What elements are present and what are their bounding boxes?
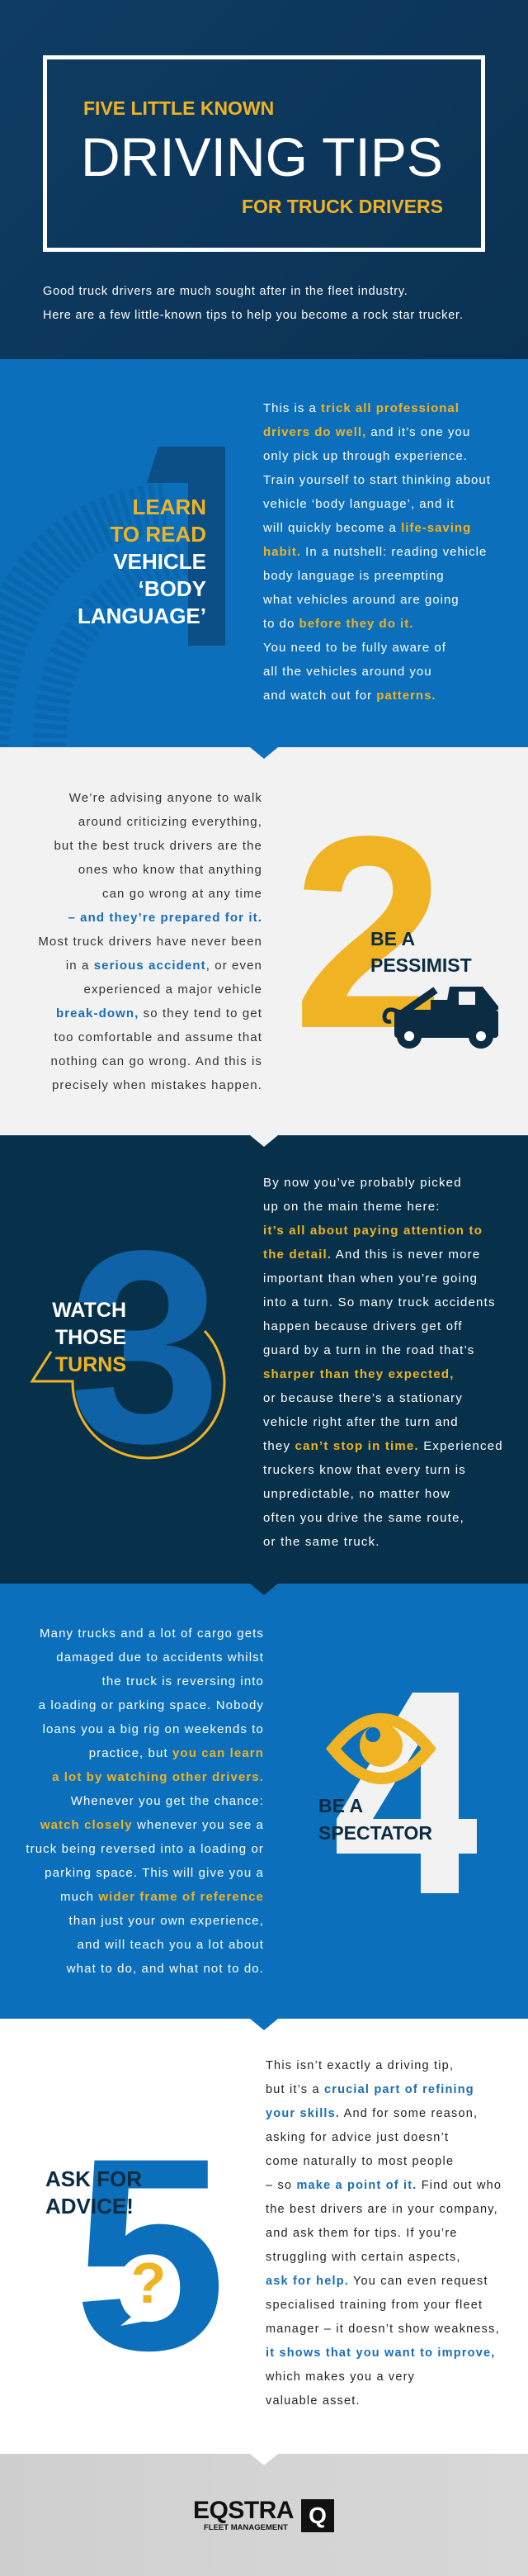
header panel	[0, 0, 528, 359]
icon: eye	[326, 1713, 436, 1784]
logo Q box	[301, 2499, 334, 2532]
body text 4: the truck is reversing into	[102, 1674, 264, 1688]
body text 5: – so make a point of it. Find out who	[266, 2179, 502, 2192]
body text 4: practice, but you can learn	[89, 1746, 264, 1760]
body text 2: experienced a major vehicle	[84, 983, 262, 997]
body text 3: happen because drivers get off	[263, 1319, 463, 1333]
heading 1	[78, 495, 206, 628]
body text 1: to do before they do it.	[263, 617, 413, 631]
body text 5: your skills. And for some reason,	[266, 2107, 478, 2120]
body text 4: Many trucks and a lot of cargo gets	[40, 1627, 264, 1641]
body text 4: damaged due to accidents whilst	[56, 1650, 264, 1664]
body text 1: vehicle ‘body language’, and it	[263, 497, 455, 511]
body text 4: a loading or parking space. Nobody	[39, 1698, 264, 1712]
body text 3: up on the main theme here:	[263, 1200, 441, 1214]
body text 5	[266, 2059, 502, 2408]
body text 3: guard by a turn in the road that’s	[263, 1343, 475, 1357]
numeral 4	[337, 1693, 477, 1893]
title frame	[43, 55, 485, 252]
body text 2: precisely when mistakes happen.	[52, 1078, 262, 1092]
heading 4: BE A	[318, 1795, 363, 1816]
body text 1: body language is preempting	[263, 569, 445, 583]
body text 2: can go wrong at any time	[102, 887, 262, 901]
arrow pointer	[250, 1135, 278, 1147]
body text 4: watch closely whenever you see a	[40, 1818, 264, 1832]
intro text	[43, 285, 464, 322]
body text 1: This is a trick all professional	[263, 401, 460, 415]
body text 4: loans you a big rig on weekends to	[43, 1722, 264, 1736]
body text 3: the detail. And this is never more	[263, 1248, 480, 1262]
heading 5: ADVICE!	[45, 2194, 134, 2218]
body text 1: will quickly become a life-saving	[263, 521, 471, 535]
body text 1: and watch out for patterns.	[263, 689, 436, 703]
arrow pointer	[250, 747, 278, 759]
heading 5	[45, 2166, 142, 2218]
heading 2: PESSIMIST	[370, 954, 472, 976]
heading 1: TO READ	[110, 522, 206, 547]
body text 4	[26, 1627, 264, 1976]
icon: question mark: ?	[131, 2251, 166, 2315]
arrow pointer	[250, 2019, 278, 2030]
body text 2: nothing can go wrong. And this is	[51, 1054, 262, 1068]
body text 3: often you drive the same route,	[263, 1511, 464, 1525]
body text 3: vehicle right after the turn and	[263, 1415, 459, 1429]
intro text: Good truck drivers are much sought after in the fleet industry.	[43, 285, 408, 298]
body text 1: all the vehicles around you	[263, 665, 432, 679]
section 4: be a spectator	[0, 1584, 528, 2019]
section 5: ask for advice	[0, 2019, 528, 2454]
body text 2: – and they’re prepared for it.	[68, 911, 262, 925]
heading 2: BE A	[370, 928, 415, 949]
heading 3	[52, 1299, 126, 1376]
body text 3: into a turn. So many truck accidents	[263, 1295, 496, 1309]
body text 3: or the same truck.	[263, 1535, 380, 1549]
body text 2: Most truck drivers have never been	[38, 935, 262, 949]
body text 5: it shows that you want to improve,	[266, 2346, 495, 2360]
logo tagline: FLEET MANAGEMENT	[204, 2523, 288, 2532]
body text 3: By now you’ve probably picked	[263, 1176, 462, 1190]
numeral 3: 3	[69, 1194, 221, 1500]
title: driving tips: DRIVING TIPS	[81, 126, 443, 187]
heading 1: ‘BODY	[139, 576, 206, 601]
body text 1: what vehicles around are going	[263, 593, 460, 607]
icon: tow truck	[383, 987, 498, 1049]
section 3: watch those turns	[0, 1135, 528, 1584]
numeral 2: 2	[293, 779, 445, 1086]
body text 3: or because there’s a stationary	[263, 1391, 463, 1405]
body text 3: important than when you’re going	[263, 1271, 478, 1286]
body text 2: but the best truck drivers are the	[54, 839, 262, 853]
body text 2: ones who know that anything	[78, 863, 262, 877]
body text 3: sharper than they expected,	[263, 1367, 455, 1381]
body text 4: than just your own experience,	[69, 1914, 264, 1928]
body text 5: ask for help. You can even request	[266, 2275, 488, 2288]
body text 4: a lot by watching other drivers.	[52, 1770, 264, 1784]
body text 4: and will teach you a lot about	[78, 1938, 264, 1952]
tire tracks decoration	[0, 483, 188, 747]
numeral 1	[147, 447, 225, 646]
body text 4: parking space. This will give you a	[45, 1866, 264, 1880]
body text 5: the best drivers are in your company,	[266, 2203, 498, 2216]
body text 3: it’s all about paying attention to	[263, 1224, 483, 1238]
body text 5: asking for advice just doesn’t	[266, 2131, 449, 2144]
body text 3: unpredictable, no matter how	[263, 1487, 450, 1501]
body text 1: habit. In a nutshell: reading vehicle	[263, 545, 487, 559]
body text 5: valuable asset.	[266, 2394, 361, 2408]
intro text: Here are a few little-known tips to help you become a rock star trucker.	[43, 309, 464, 322]
body text 5: which makes you a very	[266, 2370, 415, 2384]
body text 5: This isn’t exactly a driving tip,	[266, 2059, 454, 2072]
heading 1: LEARN	[132, 495, 206, 519]
body text 1: drivers do well, and it’s one you	[263, 425, 470, 439]
heading 3: THOSE	[55, 1326, 126, 1349]
heading 2	[370, 928, 472, 976]
body text 1: Train yourself to start thinking about	[263, 473, 491, 487]
turn arrow outline	[30, 1330, 226, 1460]
body text 4: truck being reversed into a loading or	[26, 1842, 264, 1856]
body text 2: around criticizing everything,	[78, 815, 262, 829]
body text 5: but it’s a crucial part of refining	[266, 2083, 474, 2096]
body text 1: You need to be fully aware of	[263, 641, 446, 655]
body text 2: break-down, so they tend to get	[56, 1006, 262, 1020]
heading 3: WATCH	[52, 1299, 126, 1322]
subtitle: for truck drivers: FOR TRUCK DRIVERS	[242, 196, 443, 217]
body text 5: manager – it doesn’t show weakness,	[266, 2323, 500, 2336]
heading 1: VEHICLE	[113, 549, 206, 574]
body text 4: what to do, and what not to do.	[67, 1962, 264, 1976]
body text 1	[263, 401, 491, 703]
heading 1: LANGUAGE’	[78, 604, 206, 628]
body text 5: specialised training from your fleet	[266, 2299, 483, 2312]
body text 4: much wider frame of reference	[60, 1890, 264, 1904]
body text 5: struggling with certain aspects,	[266, 2251, 461, 2264]
heading 5: ASK FOR	[45, 2166, 142, 2191]
body text 2: We’re advising anyone to walk	[69, 791, 262, 805]
body text 2	[38, 791, 262, 1092]
body text 5: come naturally to most people	[266, 2155, 454, 2168]
heading 4	[318, 1795, 432, 1844]
body text 1: only pick up through experience.	[263, 449, 468, 463]
title: five little known: FIVE LITTLE KNOWN	[83, 97, 274, 119]
body text 3: truckers know that every turn is	[263, 1463, 466, 1477]
body text 4: Whenever you get the chance:	[71, 1794, 264, 1808]
section 2: be a pessimist	[0, 747, 528, 1135]
body text 3: they can’t stop in time. Experienced	[263, 1439, 503, 1453]
arrow pointer	[250, 1584, 278, 1595]
body text 2: in a serious accident, or even	[66, 959, 262, 973]
heading 3: TURNS	[55, 1353, 126, 1376]
arrow pointer	[250, 2454, 278, 2465]
logo Q box: Q	[309, 2503, 327, 2528]
section 1: read vehicle body language	[0, 359, 528, 747]
body text 3	[263, 1176, 503, 1549]
footer	[0, 2454, 528, 2576]
heading 4: SPECTATOR	[318, 1822, 432, 1844]
body text 5: and ask them for tips. If you’re	[266, 2227, 458, 2240]
logo: eqstra fleet management	[193, 2497, 334, 2532]
numeral 5: 5	[74, 2101, 226, 2408]
logo wordmark: EQSTRA	[193, 2497, 294, 2524]
body text 2: too comfortable and assume that	[54, 1030, 262, 1044]
